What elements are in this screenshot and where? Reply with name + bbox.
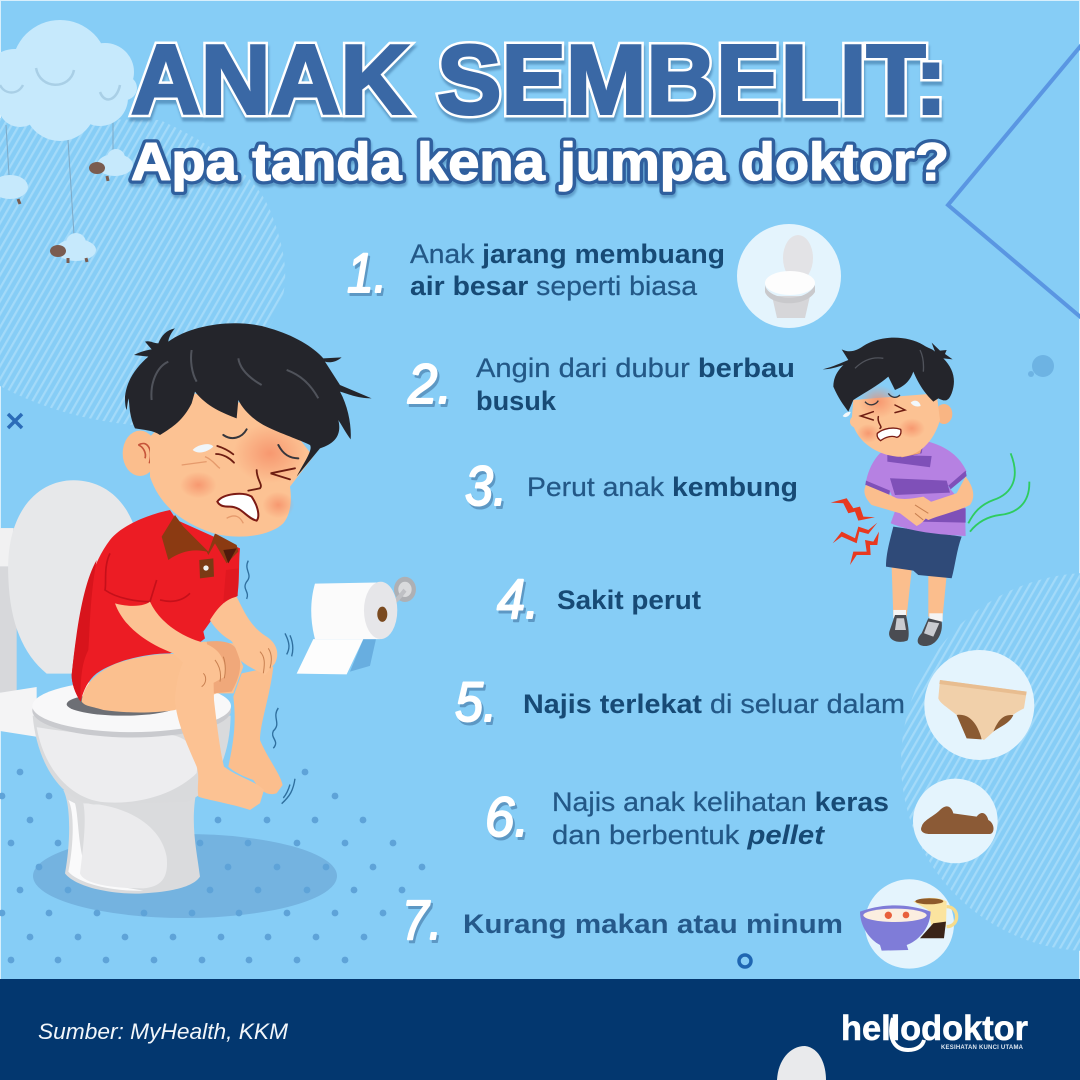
logo: hellodoktor bbox=[841, 1009, 1028, 1048]
back leg bbox=[228, 667, 283, 794]
roll bbox=[311, 582, 380, 639]
number 1: 1. bbox=[347, 241, 387, 304]
front leg bbox=[175, 653, 264, 810]
decorative ring bbox=[739, 955, 751, 967]
strings bbox=[6, 120, 113, 235]
number 4: 4. bbox=[497, 567, 539, 630]
thigh bbox=[82, 642, 243, 712]
pedestal bbox=[63, 790, 200, 894]
arms bbox=[115, 597, 277, 687]
number 6: 6. bbox=[485, 785, 529, 848]
hair bbox=[823, 338, 954, 412]
toilet paper roll bbox=[297, 577, 416, 674]
number 2: 2. bbox=[407, 352, 452, 415]
toilet lid tip bbox=[777, 1046, 826, 1080]
neck bbox=[897, 443, 923, 457]
item 6 text: dan berbentuk pellet bbox=[552, 820, 825, 850]
triangle outline bbox=[948, 42, 1080, 320]
roll end bbox=[364, 582, 397, 639]
item 7 text: Kurang makan atau minum bbox=[463, 909, 843, 939]
item 6 text: Najis anak kelihatan keras bbox=[552, 787, 889, 817]
item 2 text: Angin dari dubur berbau bbox=[476, 353, 795, 383]
footer bar bbox=[0, 979, 1080, 1080]
hatched circle top left bbox=[0, 118, 285, 425]
body bbox=[72, 510, 283, 810]
shorts bbox=[886, 527, 962, 578]
ear bbox=[936, 404, 952, 424]
number 7: 7. bbox=[402, 888, 442, 951]
number 5: 5. bbox=[455, 670, 497, 733]
title line 2: Apa tanda kena jumpa doktor? bbox=[131, 133, 949, 192]
icon: food bowl and cup bbox=[860, 879, 957, 969]
shirt bbox=[72, 510, 240, 702]
logo: KESIHATAN KUNCI UTAMA bbox=[941, 1045, 1024, 1051]
toilet bbox=[0, 480, 231, 894]
shoes bbox=[889, 615, 942, 646]
tank bbox=[0, 480, 140, 737]
under knee shade bbox=[207, 641, 240, 693]
title line 2: Apa tanda kena jumpa doktor? bbox=[131, 133, 949, 192]
body bbox=[831, 442, 1029, 646]
item 1 text: Anak jarang membuang bbox=[410, 239, 725, 269]
title line 1: ANAK SEMBELIT: bbox=[131, 24, 947, 134]
icon: pellet stool bbox=[913, 779, 998, 863]
neck bbox=[897, 443, 923, 459]
hair highlights bbox=[855, 350, 924, 372]
item 4 text: Sakit perut bbox=[557, 585, 701, 615]
head bbox=[125, 323, 372, 537]
list items bbox=[347, 239, 905, 951]
item 1 text bbox=[410, 239, 725, 301]
face features bbox=[216, 446, 295, 491]
item 3 text: Perut anak kembung bbox=[527, 472, 798, 502]
ear bbox=[123, 431, 157, 476]
floor dots bbox=[0, 769, 425, 963]
legs bbox=[892, 567, 947, 617]
sweat bbox=[843, 401, 921, 417]
cloud smiles bbox=[0, 68, 120, 99]
blush bbox=[898, 418, 925, 438]
item 5 text: Najis terlekat di seluar dalam bbox=[523, 689, 905, 719]
finger lines bbox=[202, 648, 271, 687]
eyelids bbox=[865, 393, 900, 405]
boy with stomach ache bbox=[823, 338, 1029, 646]
mouth bbox=[877, 428, 901, 441]
number 3: 3. bbox=[465, 454, 507, 517]
arms bbox=[864, 477, 973, 526]
hatched circle bottom right bbox=[901, 573, 1080, 951]
eyelids bbox=[223, 429, 298, 458]
smell waves bbox=[968, 453, 1029, 532]
floor shadow bbox=[33, 834, 337, 918]
cloud bbox=[0, 20, 137, 141]
finger lines bbox=[915, 505, 928, 520]
mouth bbox=[217, 494, 258, 521]
sheep 2 bbox=[0, 175, 28, 204]
tremble lines bbox=[245, 561, 295, 804]
sheet bbox=[297, 639, 363, 674]
roll hole bbox=[377, 607, 387, 622]
face bbox=[852, 393, 940, 457]
title bbox=[131, 24, 949, 192]
source text: Sumber: MyHealth, KKM bbox=[38, 1019, 289, 1044]
cross mark bbox=[8, 414, 22, 428]
socks bbox=[893, 610, 943, 622]
head bbox=[823, 338, 954, 457]
hair highlights bbox=[151, 350, 318, 400]
item 2 text: busuk bbox=[476, 386, 557, 416]
shirt bbox=[865, 442, 967, 536]
item 2 text bbox=[476, 353, 795, 416]
title line 1: ANAK SEMBELIT: bbox=[131, 24, 947, 134]
sheep 3 bbox=[50, 233, 96, 263]
item 1 text: air besar seperti biasa bbox=[410, 271, 698, 301]
icon: toilet bbox=[737, 224, 841, 328]
cloud with sheep bbox=[0, 20, 137, 263]
pain zigzags bbox=[831, 498, 879, 565]
eyes and nose bbox=[861, 405, 905, 428]
paper shadow bbox=[350, 639, 376, 672]
face blush bbox=[233, 423, 307, 483]
bowl bbox=[32, 680, 231, 804]
decorative blob bbox=[1028, 355, 1054, 377]
sweat drop bbox=[193, 444, 213, 452]
icon: stained underwear bbox=[924, 650, 1034, 760]
cheek wrinkles bbox=[182, 457, 243, 523]
item 6 text bbox=[552, 787, 889, 850]
main boy on toilet bbox=[72, 323, 372, 810]
sheep 1 bbox=[89, 149, 133, 181]
holder bbox=[383, 577, 416, 607]
hair bbox=[125, 323, 372, 477]
